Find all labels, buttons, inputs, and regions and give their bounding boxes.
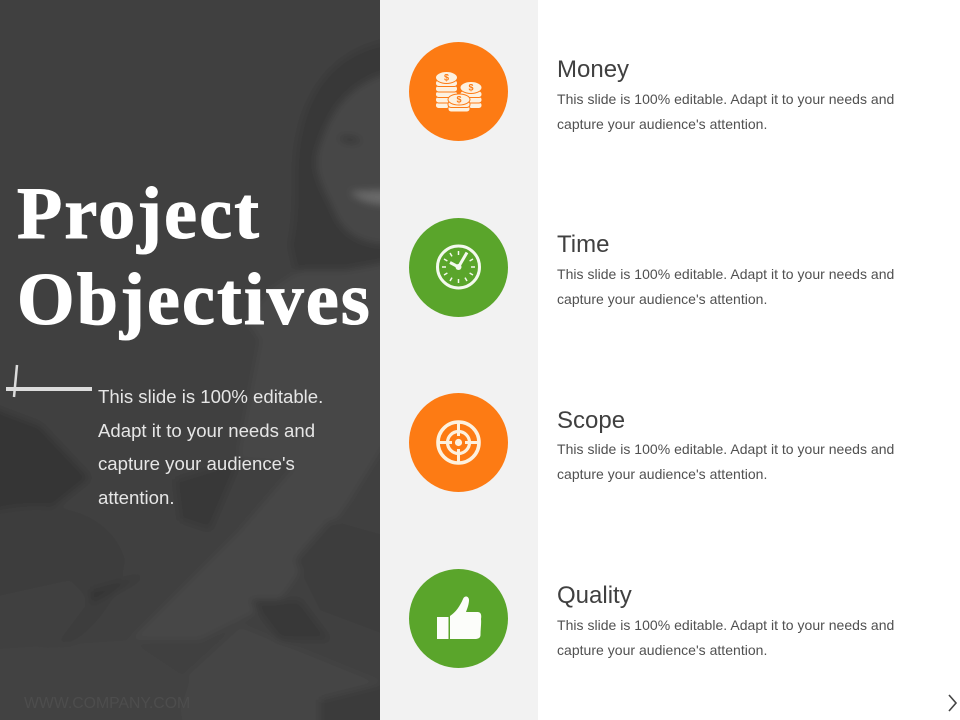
icon: money coins: $ [444, 72, 449, 82]
text block: scope: This slide is 100% editable. Adapt it to your needs and [557, 441, 894, 457]
icon: money coins [409, 42, 508, 141]
panel: icon strip [380, 0, 538, 720]
photo: woman at desk [0, 0, 400, 720]
lead text: capture your audience's [98, 453, 295, 474]
title [17, 173, 372, 341]
text block: time: capture your audience's attention. [557, 291, 767, 307]
text block: quality: This slide is 100% editable. Adapt it to your needs and [557, 617, 894, 633]
text block: scope: capture your audience's attention. [557, 466, 767, 482]
icon: thumbs up [409, 569, 508, 668]
lead text: Adapt it to your needs and [98, 420, 315, 441]
text block: money [557, 56, 894, 132]
text block: money: This slide is 100% editable. Adapt it to your needs and [557, 91, 894, 107]
title: Project [17, 173, 261, 255]
text block: quality: capture your audience's attention. [557, 642, 767, 658]
text block: scope [557, 407, 894, 482]
lead text: This slide is 100% editable. [98, 386, 323, 407]
title: Objectives [17, 259, 372, 341]
icon: clock [409, 218, 508, 317]
lead text: attention. [98, 487, 174, 508]
icon: target [409, 393, 508, 492]
icon: money coins: $ [456, 94, 462, 104]
text block: time: Time [557, 231, 609, 258]
text block: money: Money [557, 56, 629, 83]
text block: quality [557, 582, 894, 658]
panel: dark photo background [0, 0, 380, 720]
text block: time [557, 231, 894, 307]
text block: quality: Quality [557, 582, 632, 609]
text block: money: capture your audience's attention. [557, 116, 767, 132]
icon: money coins: $ [468, 82, 474, 92]
lead text [98, 386, 323, 508]
text block: time: This slide is 100% editable. Adapt it to your needs and [557, 266, 894, 282]
watermark: www.company.com: WWW.COMPANY.COM [24, 695, 190, 712]
accent: crossed lines [6, 364, 92, 398]
arrow: next [948, 694, 957, 712]
text block: scope: Scope [557, 407, 625, 434]
